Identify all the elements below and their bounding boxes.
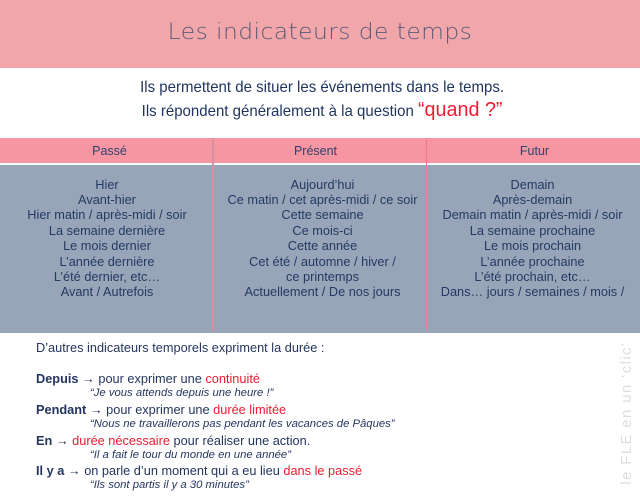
header: Présent: Présent bbox=[294, 144, 337, 158]
Depuis rule: Depuis → pour exprimer une continuité bbox=[36, 370, 260, 386]
duration intro: D’autres indicateurs temporels expriment la durée : bbox=[36, 340, 324, 354]
table header band bbox=[0, 138, 640, 163]
column: future indicators: L’été prochain, etc… bbox=[474, 269, 591, 284]
column: present indicators: Cette année bbox=[288, 238, 357, 253]
Il y a example: “Ils sont partis il y a 30 minutes” bbox=[90, 479, 249, 491]
title banner bbox=[0, 0, 640, 68]
Depuis example: “Je vous attends depuis une heure !” bbox=[90, 387, 273, 399]
column: future indicators: Dans… jours / semaines / mois / bbox=[441, 284, 624, 299]
header: Passé: Passé bbox=[92, 144, 127, 158]
En example: “Il a fait le tour du monde en une année” bbox=[90, 449, 291, 461]
column: past indicators: Avant / Autrefois bbox=[61, 284, 153, 299]
column: past indicators: Avant-hier bbox=[78, 192, 136, 207]
column: future indicators: Demain bbox=[511, 176, 554, 192]
title: Les indicateurs de temps bbox=[168, 20, 472, 45]
column: present indicators: Actuellement / De nos jours bbox=[245, 284, 400, 299]
introduction text: Ils permettent de situer les événements dans le temps. bbox=[140, 78, 504, 96]
column: future indicators: Le mois prochain bbox=[484, 238, 581, 253]
Il y a rule: Il y a → on parle d’un moment qui a eu lieu dans le passé bbox=[36, 463, 362, 478]
column: future indicators: La semaine prochaine bbox=[470, 223, 595, 238]
column: past indicators: L’année dernière bbox=[60, 254, 154, 269]
column: past indicators: La semaine dernière bbox=[49, 223, 165, 238]
vertical watermark: le FLE en un ‘clic’ bbox=[618, 341, 635, 485]
column: present indicators: Ce mois-ci bbox=[292, 223, 353, 238]
column: present indicators: Aujourd’hui bbox=[291, 176, 354, 192]
column: past indicators: Le mois dernier bbox=[63, 238, 151, 253]
column divider bbox=[212, 138, 214, 331]
column: past indicators bbox=[27, 176, 187, 299]
column: present indicators bbox=[228, 176, 418, 299]
column: future indicators: Après-demain bbox=[493, 192, 572, 207]
column: past indicators: Hier matin / après-midi / soir bbox=[27, 207, 187, 222]
column: present indicators: Cette semaine bbox=[281, 207, 364, 222]
introduction text bbox=[140, 78, 504, 121]
column: future indicators bbox=[441, 176, 624, 299]
Pendant rule: Pendant → pour exprimer une durée limitée bbox=[36, 402, 286, 416]
column: past indicators: Hier bbox=[95, 176, 119, 192]
header: Futur: Futur bbox=[520, 144, 549, 158]
column: future indicators: L’année prochaine bbox=[480, 254, 585, 269]
column: present indicators: ce printemps bbox=[286, 269, 359, 284]
column: present indicators: Ce matin / cet après-midi / ce soir bbox=[228, 192, 417, 207]
column divider bbox=[426, 138, 427, 331]
column: present indicators: Cet été / automne / hiver / bbox=[249, 254, 396, 269]
column: future indicators: Demain matin / après-midi / soir bbox=[442, 207, 622, 222]
En rule: En → durée nécessaire pour réaliser une action. bbox=[36, 432, 310, 448]
Pendant example: “Nous ne travaillerons pas pendant les vacances de Pâques” bbox=[90, 418, 395, 430]
introduction text: Ils répondent généralement à la question “quand ?” bbox=[142, 98, 503, 121]
table body band bbox=[0, 165, 640, 333]
column: past indicators: L’été dernier, etc… bbox=[54, 269, 160, 284]
